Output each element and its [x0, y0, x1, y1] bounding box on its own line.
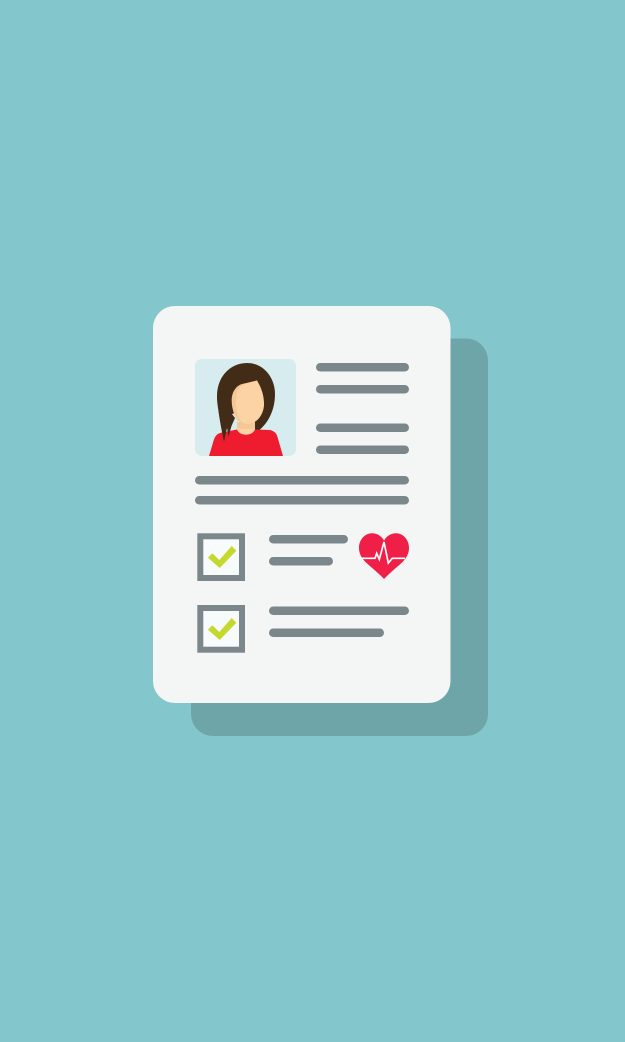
text lines: second checklist item	[269, 606, 409, 637]
document shadow	[191, 338, 488, 736]
checkbox 1	[200, 536, 242, 578]
neck	[237, 422, 255, 435]
neck shadow	[237, 422, 255, 429]
hair strand	[218, 407, 235, 442]
patient photo	[195, 359, 296, 456]
checkbox 2	[200, 608, 242, 650]
icon: heart with pulse	[359, 533, 409, 579]
face shadow	[232, 380, 264, 424]
document card	[153, 306, 450, 703]
text lines: first checklist item	[269, 535, 348, 566]
check mark	[208, 546, 236, 568]
hair back	[217, 363, 275, 442]
text lines: patient details	[316, 363, 409, 454]
check mark	[208, 618, 236, 640]
shirt	[209, 430, 283, 456]
face	[236, 380, 264, 424]
text lines: summary	[195, 476, 409, 504]
